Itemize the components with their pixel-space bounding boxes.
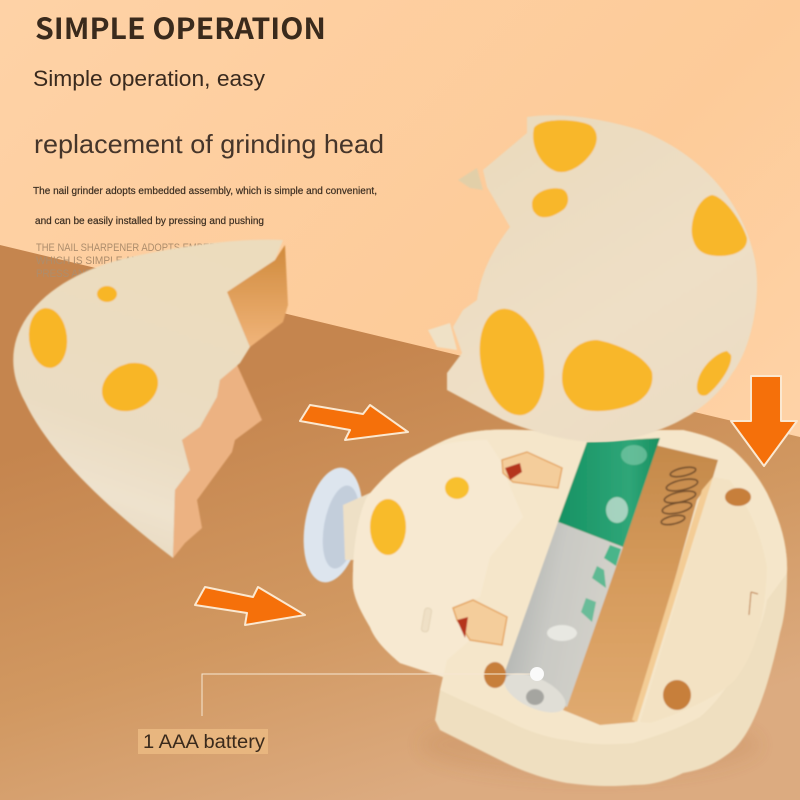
lower inner wall <box>173 365 262 558</box>
description line two: and can be easily installed by pressing and pushing <box>35 216 264 227</box>
outer shell <box>13 240 283 558</box>
upper red clip <box>505 463 522 480</box>
arrow: lower right-pointing <box>195 587 305 625</box>
yellow spots on cover <box>370 499 406 555</box>
cover slit <box>421 607 432 632</box>
compartment light edge <box>632 477 713 722</box>
faded uppercase caption <box>36 242 236 280</box>
yellow spots <box>470 120 747 421</box>
upper inner wall <box>227 245 288 347</box>
lower clip slot <box>453 600 507 645</box>
battery compartment <box>563 445 718 725</box>
callout: battery label: 1 AAA battery <box>143 732 266 753</box>
background: tan table surface <box>0 245 800 800</box>
description line one: The nail grinder adopts embedded assembly, which is simple and convenient, <box>33 186 377 197</box>
inner tray <box>640 477 767 723</box>
subheading line two: replacement of grinding head <box>34 129 384 159</box>
arrow: upper right-pointing <box>300 405 408 440</box>
side tab <box>428 323 457 350</box>
upper clip slot <box>502 452 562 488</box>
lower red clip <box>457 617 468 638</box>
screw holes <box>484 488 751 710</box>
base wall <box>353 430 787 786</box>
faded uppercase caption: PRESS AND <box>36 268 92 280</box>
subheading line one: Simple operation, easy <box>33 66 266 91</box>
nail grinder base <box>295 430 787 786</box>
spring <box>660 465 699 526</box>
AAA battery <box>499 438 660 721</box>
side mark <box>749 592 758 615</box>
upper egg shell half <box>428 115 757 442</box>
yellow spots <box>26 306 70 370</box>
soft shadow <box>420 711 760 779</box>
faded uppercase caption: THE NAIL SHARPENER ADOPTS EMBEDDED <box>36 242 236 254</box>
heading: simple operation: SIMPLE OPERATION <box>35 6 326 48</box>
base top surface <box>353 430 787 744</box>
left egg shell half <box>13 240 288 558</box>
grinding head <box>295 463 372 587</box>
top tab <box>458 168 483 190</box>
callout: battery label <box>138 667 544 754</box>
shell body <box>447 115 757 442</box>
faded uppercase caption: WHICH IS SIMPLE AND <box>36 255 146 267</box>
front cover section <box>353 440 523 677</box>
arrow: down-pointing <box>731 376 797 466</box>
